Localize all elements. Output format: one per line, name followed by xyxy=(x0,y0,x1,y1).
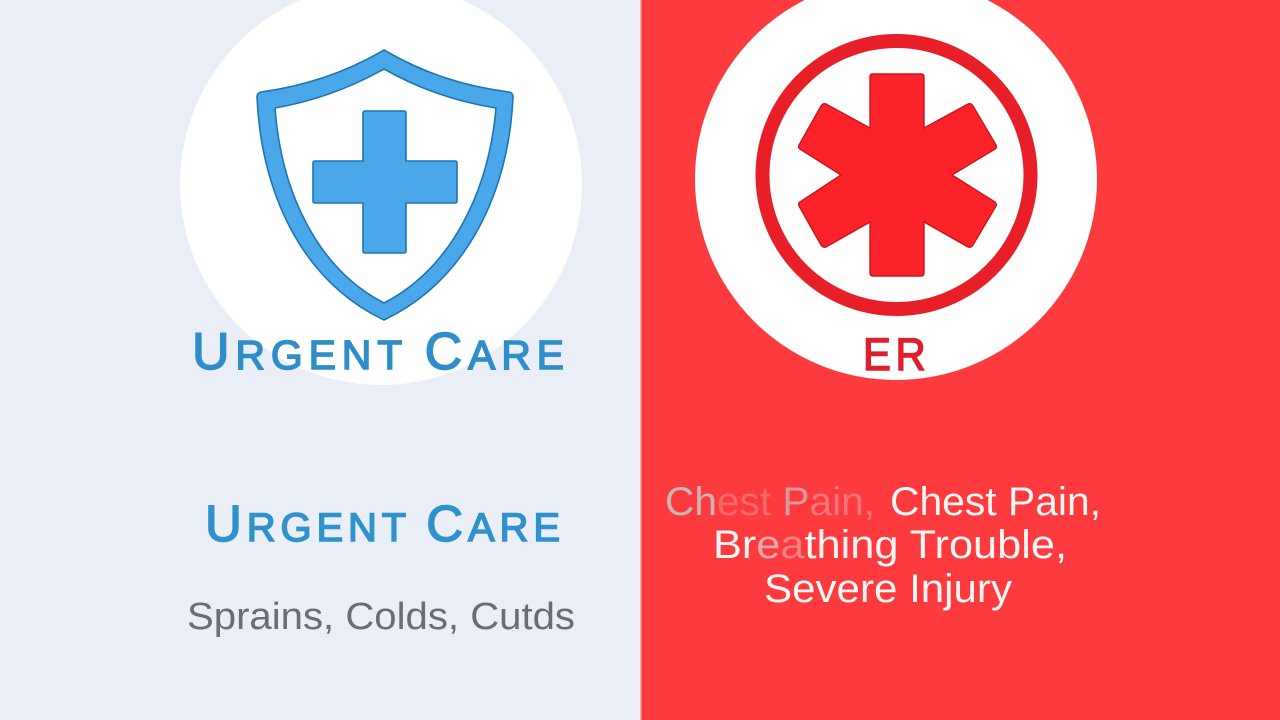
divider edge xyxy=(640,0,642,720)
heading: ER label: ER xyxy=(863,331,930,380)
icon: white circle badge xyxy=(180,0,582,385)
icon: red ring with star of life xyxy=(762,41,1030,309)
text: ghosted duplicate line: Chest Pain, xyxy=(665,480,875,524)
text: breathing trouble: Breathing Trouble, xyxy=(713,523,1067,567)
panel: emergency room xyxy=(640,0,1280,720)
heading: urgent care logo label: URGENT CARE xyxy=(192,323,564,381)
icon: white circle badge xyxy=(695,0,1097,380)
panel: urgent care xyxy=(0,0,641,720)
text: chest pain: Chest Pain, xyxy=(890,480,1101,524)
heading: urgent care: URGENT CARE xyxy=(205,495,560,552)
text: urgent care conditions: Sprains, Colds, Cutds xyxy=(187,596,575,638)
text: severe injury: Severe Injury xyxy=(764,567,1012,611)
text: ER conditions xyxy=(665,480,1101,611)
icon: blue shield with cross xyxy=(257,50,513,320)
